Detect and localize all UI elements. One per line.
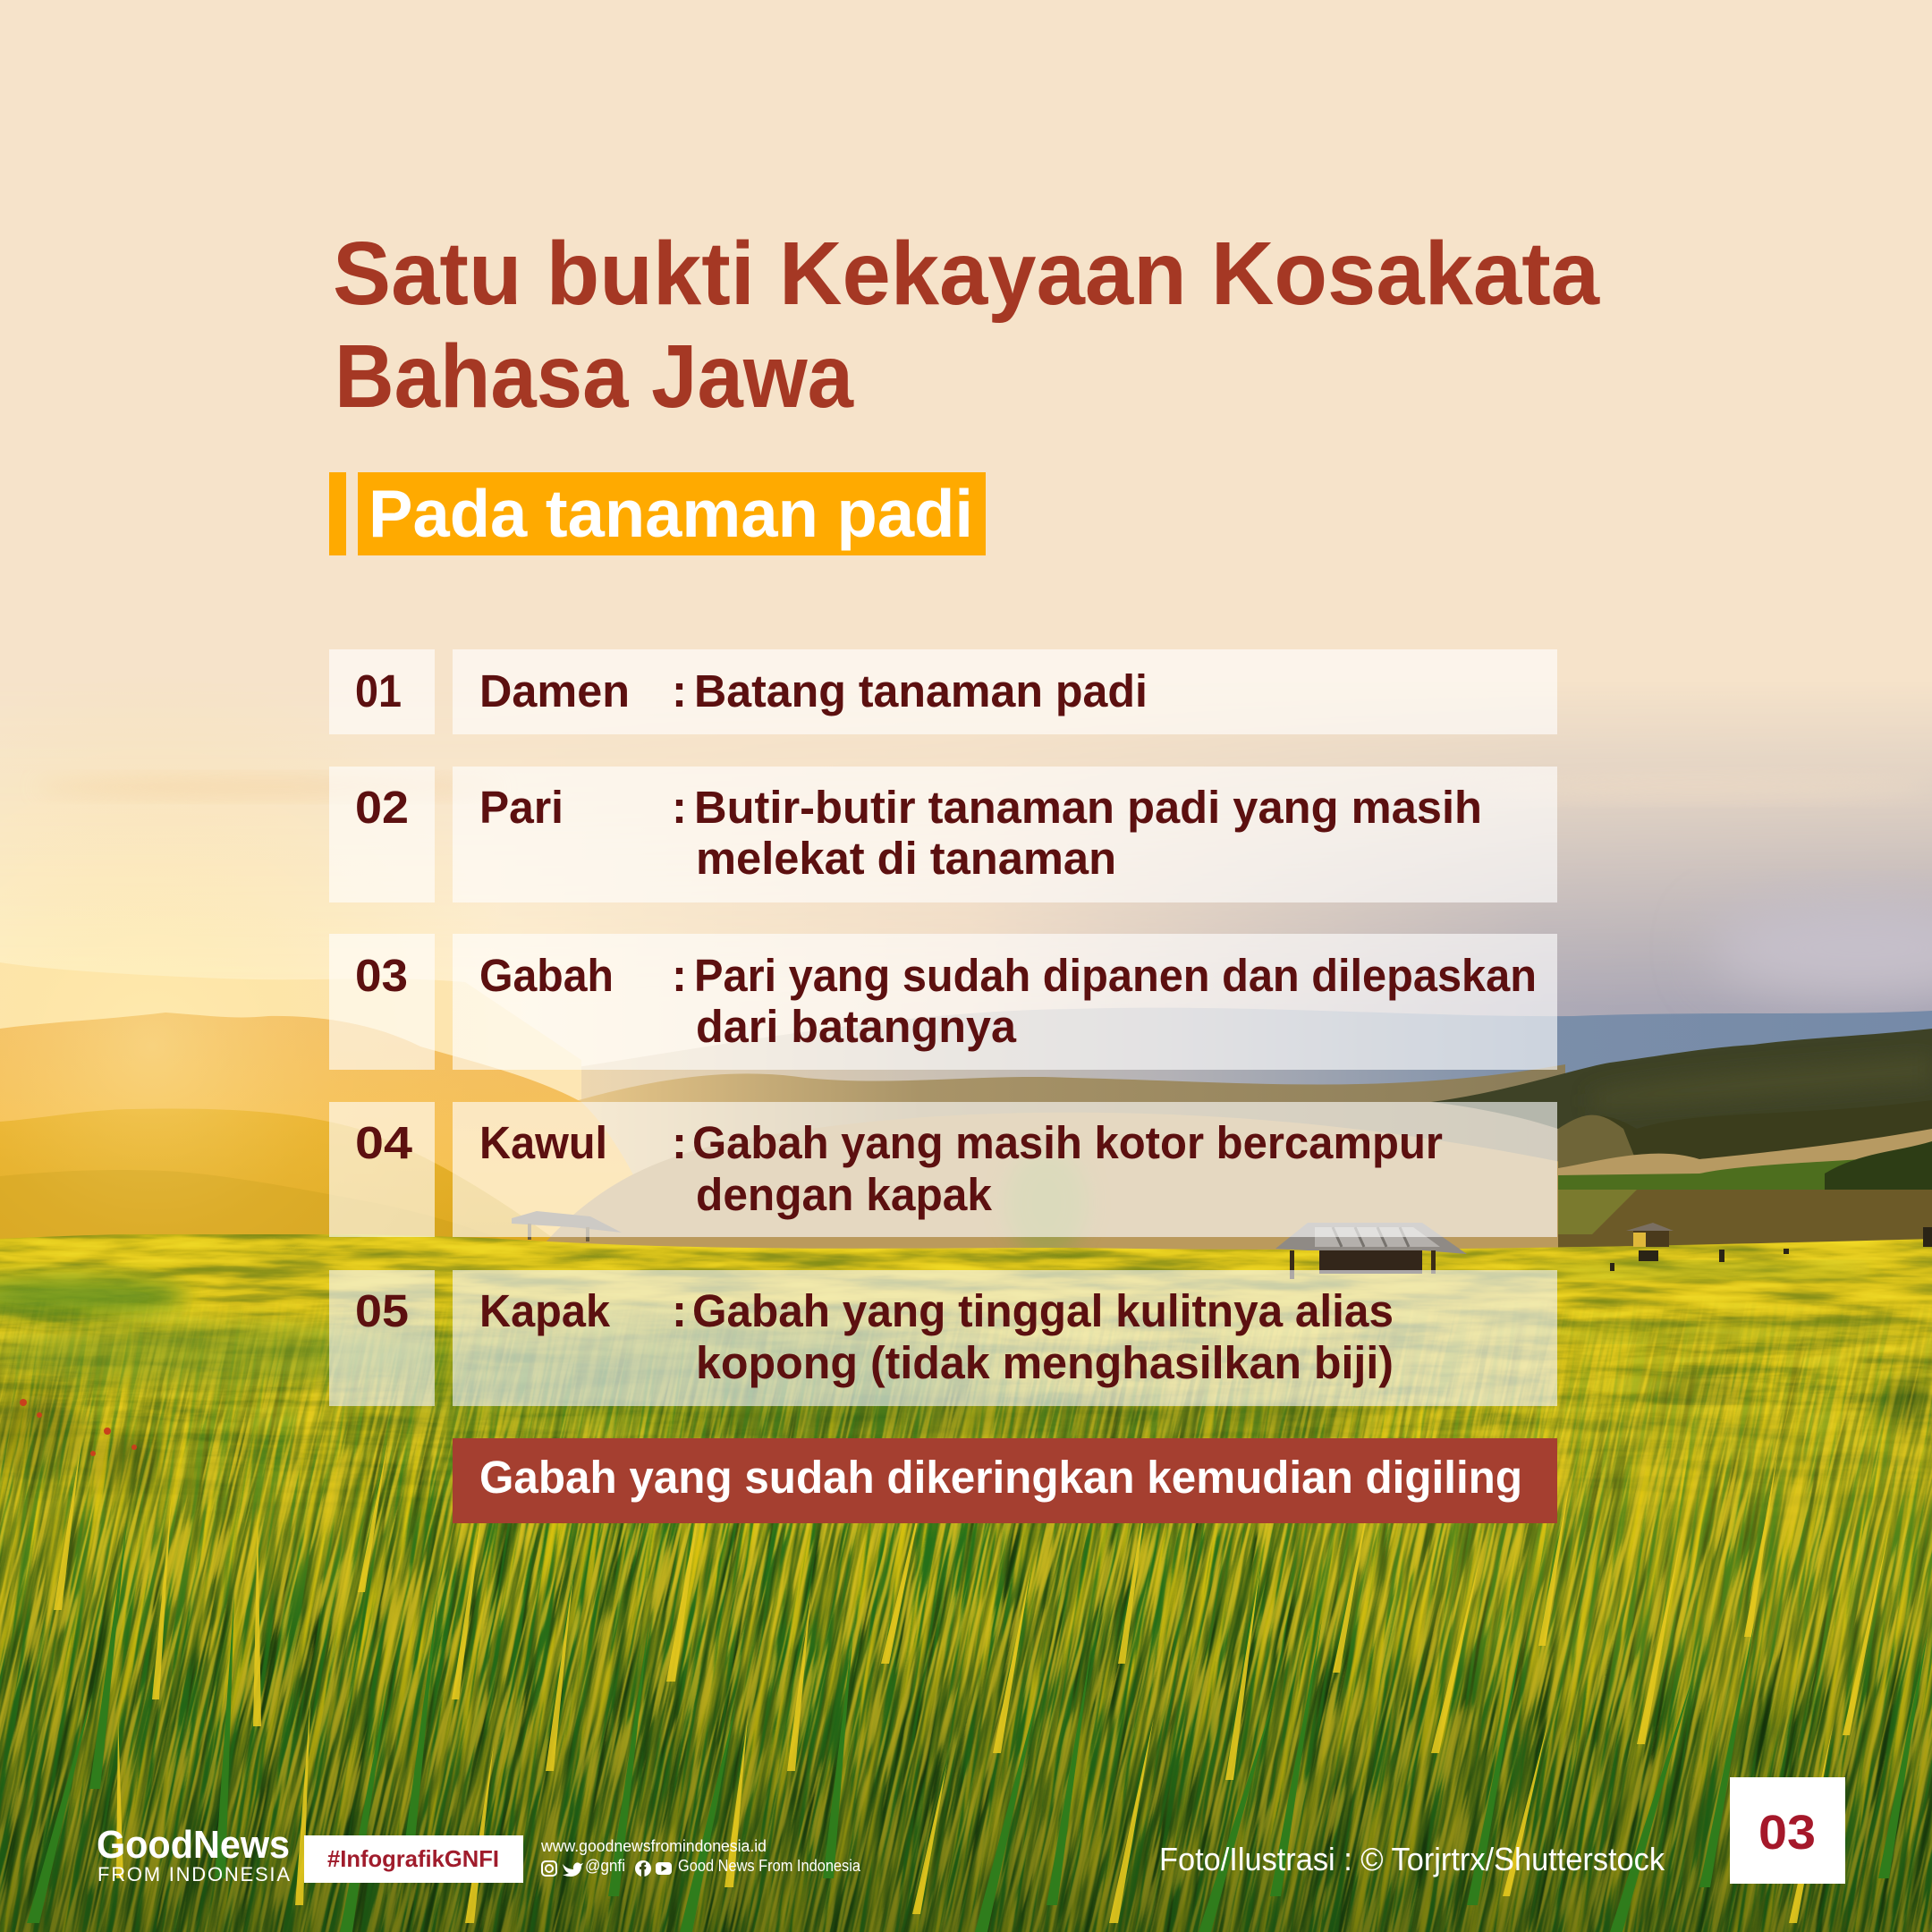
- row 01: Damen: [329, 649, 1557, 734]
- icon: facebook: [635, 1860, 651, 1877]
- callout: Gabah yang sudah dikeringkan kemudian digiling: Gabah yang sudah dikeringkan kemudian digiling: [479, 1452, 1522, 1503]
- row 03: Gabah: [329, 934, 1557, 1070]
- entry: Damen: Damen: [479, 665, 630, 716]
- website and social handles: @gnfi: [585, 1857, 625, 1875]
- rice terraces: [0, 1234, 1932, 1932]
- entry: Kapak: Gabah yang tinggal kulitnya alias: [692, 1285, 1394, 1336]
- number 03: 03: [355, 950, 408, 1001]
- icon: youtube: [656, 1862, 672, 1875]
- entry: Pari: Butir-butir tanaman padi yang masih: [694, 782, 1482, 833]
- row 05: Kapak: [329, 1270, 1557, 1406]
- number 01: [329, 649, 435, 734]
- number 02: [329, 767, 435, 902]
- entry: Pari: :: [672, 782, 687, 833]
- number 02: 02: [355, 782, 409, 833]
- icon: instagram: [542, 1861, 556, 1876]
- entry: Pari: [453, 767, 1557, 902]
- main hut: [1275, 1223, 1467, 1279]
- logo: GoodNews from Indonesia: FROM INDONESIA: [97, 1863, 290, 1885]
- number 04: [329, 1102, 435, 1237]
- entry: Kapak: :: [672, 1285, 687, 1336]
- entry: Gabah: dari batangnya: [696, 1001, 1017, 1052]
- title: Bahasa Jawa: [335, 326, 854, 427]
- entry: Gabah: Pari yang sudah dipanen dan dilepaskan: [694, 950, 1537, 1001]
- title: Satu bukti Kekayaan Kosakata: [333, 224, 1600, 324]
- hashtag tag: #InfografikGNFI: [327, 1845, 499, 1872]
- entry: Gabah: :: [672, 950, 687, 1001]
- page number: [1730, 1777, 1845, 1884]
- logo: GoodNews from Indonesia: GoodNews: [97, 1823, 290, 1867]
- number 04: 04: [355, 1117, 413, 1168]
- number 05: [329, 1270, 435, 1406]
- entry: Gabah: [453, 934, 1557, 1070]
- grass blades: [54, 1440, 1889, 1923]
- row 02: Pari: [329, 767, 1557, 902]
- left hut: [512, 1211, 622, 1241]
- entry: Kawul: Kawul: [479, 1117, 607, 1168]
- photo credit: Foto/Ilustrasi : © Torjrtrx/Shutterstock: [1159, 1841, 1665, 1877]
- number 01: 01: [355, 665, 402, 716]
- callout: Gabah yang sudah dikeringkan kemudian digiling: [453, 1438, 1557, 1523]
- subtitle: Pada tanaman padi: Pada tanaman padi: [369, 476, 973, 551]
- entry: Kawul: :: [672, 1117, 687, 1168]
- background photo: rice field at sunset fading into cream sky: [0, 716, 1932, 1932]
- red flowers on bushes: [20, 1399, 137, 1456]
- logo: GoodNews from Indonesia: [97, 1823, 290, 1885]
- entry: Kapak: [453, 1270, 1557, 1406]
- icon: twitter: [563, 1862, 583, 1877]
- website and social handles: www.goodnewsfromindonesia.id: [540, 1837, 767, 1855]
- entry: Damen: Batang tanaman padi: [694, 665, 1148, 716]
- entry: Kapak: kopong (tidak menghasilkan biji): [696, 1337, 1394, 1388]
- title: [333, 224, 1600, 427]
- small hut right: [1626, 1223, 1674, 1247]
- entry: Kapak: Kapak: [479, 1285, 611, 1336]
- website and social handles: [540, 1837, 861, 1877]
- entry: Kawul: Gabah yang masih kotor bercampur: [692, 1117, 1443, 1168]
- number 05: 05: [355, 1285, 409, 1336]
- page number: 03: [1758, 1806, 1816, 1860]
- distant farmers: [1610, 1227, 1932, 1271]
- entry: Pari: Pari: [479, 782, 564, 833]
- row 04: Kawul: [329, 1102, 1557, 1237]
- entry: Damen: [453, 649, 1557, 734]
- entry: Gabah: Gabah: [479, 950, 614, 1001]
- entry: Damen: :: [672, 665, 687, 716]
- number 03: [329, 934, 435, 1070]
- website and social handles: Good News From Indonesia: [678, 1857, 861, 1875]
- entry: Kawul: [453, 1102, 1557, 1237]
- entry: Kawul: dengan kapak: [696, 1169, 993, 1220]
- hashtag tag: [304, 1835, 523, 1883]
- entry: Pari: melekat di tanaman: [696, 833, 1116, 884]
